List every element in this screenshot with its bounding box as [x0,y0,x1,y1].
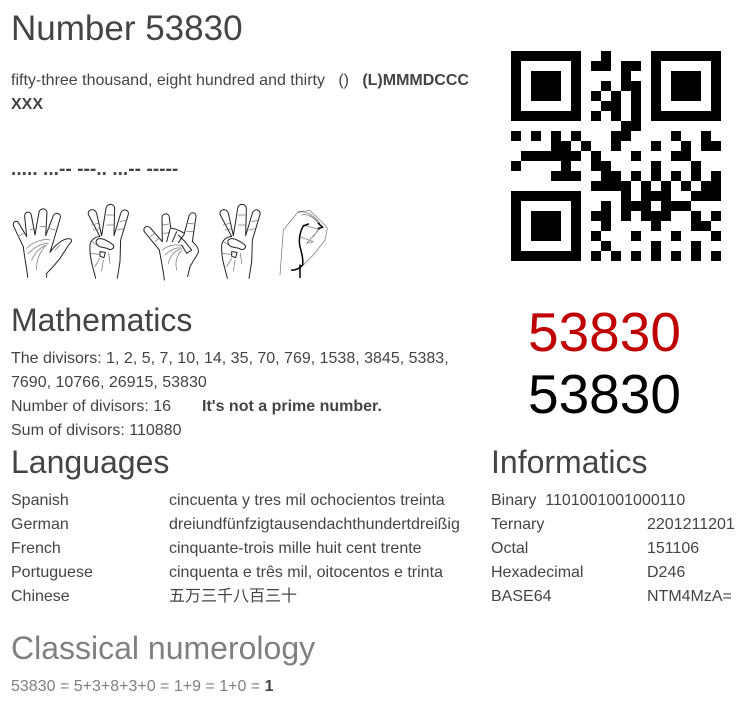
mathematics text: 7690, 10766, 26915, 53830 [11,374,207,391]
languages table: cinquenta e três mil, oitocentos e trinta [169,564,443,581]
languages table: cinquante-trois mille huit cent trente [169,540,422,557]
heading: informatics: Informatics [491,444,647,480]
sign language hands [12,204,328,280]
title: Number 53830 [11,9,243,48]
number in words and roman numeral [11,72,469,113]
mathematics text: Sum of divisors: 110880 [11,422,181,439]
languages table: dreiundfünfzigtausendachthundertdreißig [169,516,460,533]
informatics table: 2201211201 [647,516,735,533]
icon: hand sign three [88,204,128,278]
informatics table: BASE64 [491,588,551,605]
informatics table: NTM4MzA= [647,588,732,605]
mathematics text: The divisors: 1, 2, 5, 7, 10, 14, 35, 70, 769, 1538, 3845, 5383, [11,350,449,367]
icon: hand sign zero [280,211,327,277]
languages table: German [11,516,69,533]
mathematics text: Number of divisors: 16 [11,398,171,415]
languages table: Portuguese [11,564,93,581]
informatics table: Hexadecimal [491,564,583,581]
mathematics text [11,350,449,439]
heading: languages: Languages [11,444,169,480]
languages table [11,492,460,605]
number in words and roman numeral: fifty-three thousand, eight hundred and thirty () (L)MMMDCCC [11,72,469,89]
informatics table: Octal [491,540,528,557]
morse code: ..... ...-- ---.. ...-- ----- [11,159,178,180]
QR code [511,51,721,261]
languages table: French [11,540,61,557]
mathematics text: It's not a prime number. [202,398,382,415]
informatics table: Binary 1101001001000110 [491,492,685,509]
icon: hand sign five [13,209,71,277]
informatics table: D246 [647,564,685,581]
languages table: Chinese [11,588,70,605]
icon: hand sign three repeat [220,204,260,278]
large black number: 53830 [528,363,681,425]
numerology calculation: 53830 = 5+3+8+3+0 = 1+9 = 1+0 = 1 [11,678,273,695]
languages table: cincuenta y tres mil ochocientos treinta [169,492,445,509]
informatics table: 151106 [647,540,699,557]
large red number: 53830 [528,301,681,363]
languages table: Spanish [11,492,69,509]
informatics table: Ternary [491,516,544,533]
heading: mathematics: Mathematics [11,302,192,338]
informatics table [491,492,735,605]
languages table: 五万三千八百三十 [169,588,297,605]
number in words and roman numeral: XXX [11,96,43,113]
icon: hand sign eight [144,213,198,280]
heading: classical numerology: Classical numerology [11,630,315,666]
